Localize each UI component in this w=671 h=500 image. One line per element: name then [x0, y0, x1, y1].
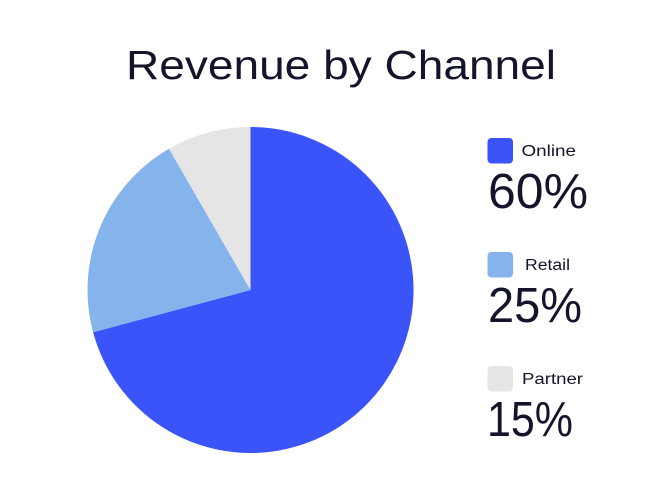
value: partner: 15%	[487, 393, 573, 447]
pie chart	[88, 127, 414, 453]
swatch: partner	[488, 366, 513, 392]
pie slice: retail	[88, 149, 250, 332]
label: online: Online	[522, 143, 576, 160]
legend item: partner	[487, 366, 583, 447]
value: online: 60%	[488, 165, 588, 219]
value: retail: 25%	[488, 279, 582, 333]
swatch: online	[488, 138, 513, 164]
pie slice: online	[93, 127, 414, 453]
title: Revenue by Channel	[126, 42, 556, 88]
label: retail: Retail	[525, 257, 570, 274]
label: partner: Partner	[522, 371, 583, 388]
swatch: retail	[488, 252, 513, 278]
pie slice: partner	[169, 127, 250, 290]
legend item: retail	[488, 252, 582, 333]
legend item: online	[488, 138, 588, 219]
